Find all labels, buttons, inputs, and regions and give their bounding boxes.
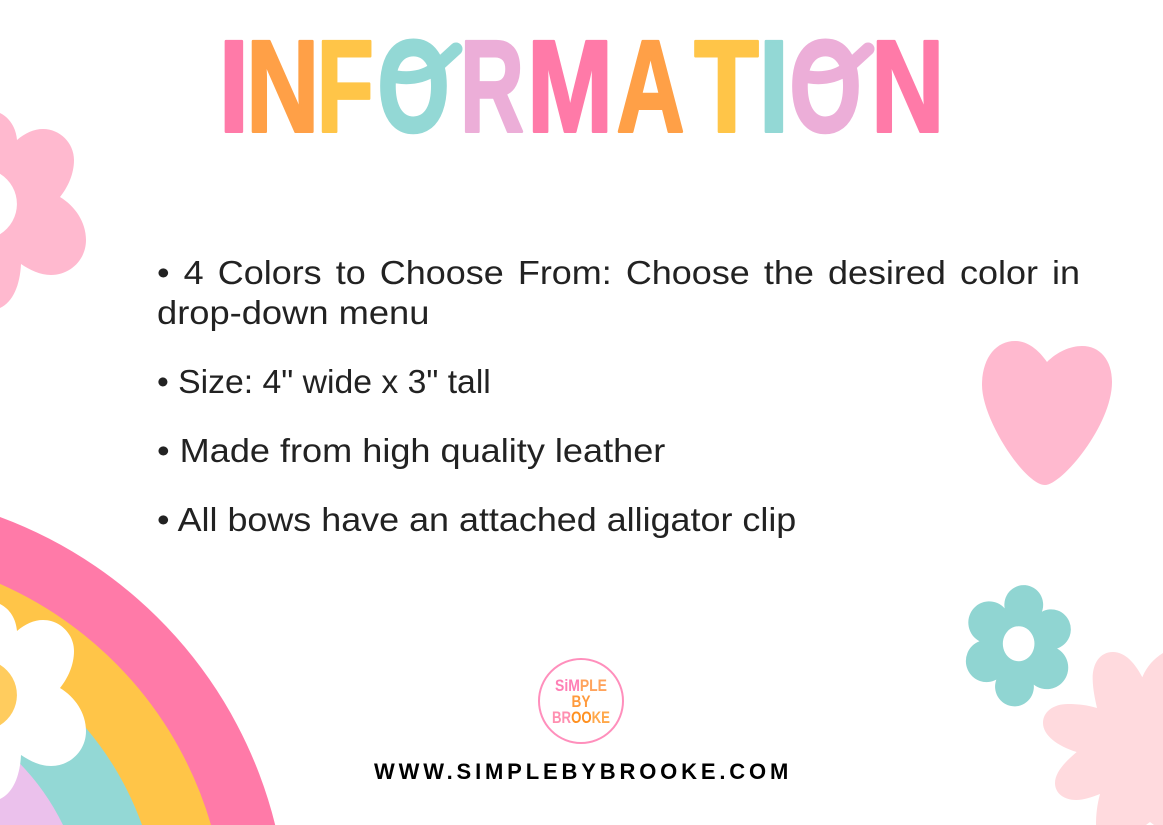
logo badge: SiMPLE — [555, 676, 607, 695]
website url: WWW.SIMPLEBYBROOKE.COM — [374, 759, 792, 784]
title: N — [871, 13, 944, 159]
title: O — [377, 14, 450, 160]
logo badge: BY — [572, 692, 591, 711]
title: M — [527, 13, 613, 159]
bullet: colors: • 4 Colors to Choose From: Choose the desired color in — [157, 254, 1080, 291]
icon: pink heart — [982, 341, 1112, 485]
bullet: clip: • All bows have an attached alligator clip — [157, 501, 796, 538]
title: T — [694, 14, 759, 160]
title: F — [317, 14, 374, 160]
bullet: material: • Made from high quality leather — [157, 432, 665, 469]
title: I — [218, 13, 249, 160]
icon: teal flower — [966, 585, 1071, 706]
icon: pink flower top left — [0, 113, 86, 308]
bullet: size: • Size: 4" wide x 3" tall — [157, 363, 491, 400]
icon: white flower on rainbow — [0, 604, 86, 799]
icon: rainbow — [0, 517, 275, 825]
text block: product details — [157, 254, 1080, 538]
logo badge: BROOKE — [552, 708, 610, 727]
title: A — [616, 14, 685, 160]
icon: light pink flower bottom right — [1043, 652, 1163, 825]
title — [218, 13, 944, 160]
logo badge — [539, 659, 623, 743]
title: N — [246, 13, 319, 159]
bullet: colors continued: drop-down menu — [157, 294, 429, 331]
title: O — [789, 14, 862, 160]
title: I — [758, 13, 789, 160]
title: R — [460, 13, 524, 160]
